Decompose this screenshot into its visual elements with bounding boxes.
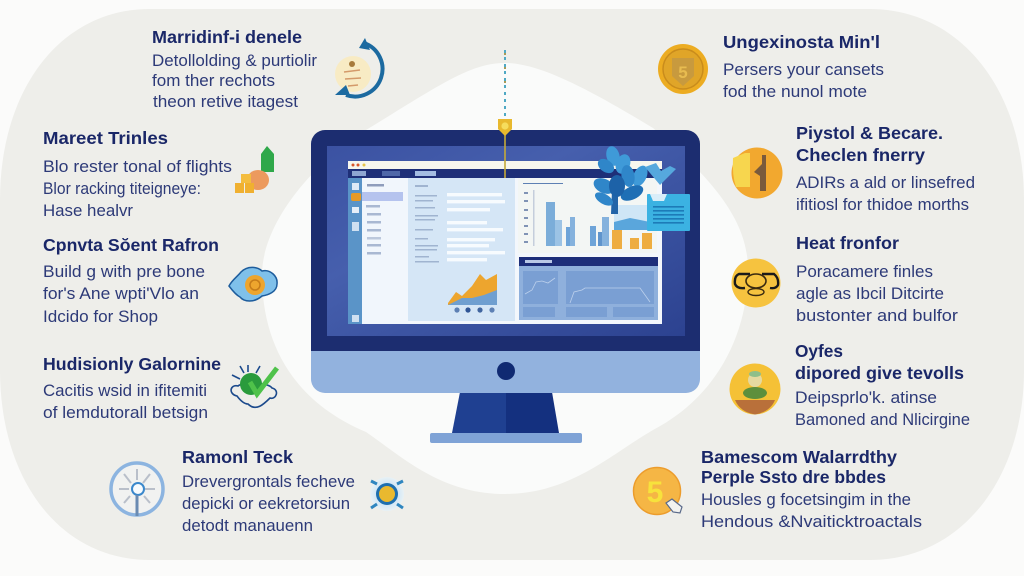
icon: dollar coin with cursor xyxy=(634,468,682,514)
area chart xyxy=(448,274,497,313)
app window xyxy=(348,161,662,324)
item: fourth left xyxy=(43,354,221,422)
item: fifth left xyxy=(182,447,355,535)
item: bottom right xyxy=(701,447,922,531)
item: fifth left: depicki or eekretorsiun xyxy=(182,495,350,513)
item: second right: Piystol & Becare. xyxy=(796,123,943,143)
item: bottom right: Hendous &Nvaiticktroactals xyxy=(701,513,922,531)
note card xyxy=(647,194,690,231)
connector: dashed line and pin xyxy=(504,50,506,118)
item: top right: fod the nunol mote xyxy=(723,83,867,101)
item: second right: ADIRs a ald or linsefred xyxy=(796,174,975,192)
item: fourth right: Oyfes xyxy=(795,341,843,361)
central white blob xyxy=(262,63,748,494)
item: third left: Cpnvta Sŏent Rafron xyxy=(43,235,219,255)
icon: dial xyxy=(111,463,163,516)
photo card xyxy=(614,205,650,230)
item: fifth left: Ramonl Teck xyxy=(182,447,293,467)
monitor body xyxy=(311,130,700,393)
item: fourth left: Hudisionly Galornine xyxy=(43,354,221,374)
item: market trends: Hase healvr xyxy=(43,202,134,220)
icon: dollar coin with cursor: 5 xyxy=(647,476,663,509)
item: third right: bustonter and bulfor xyxy=(796,307,959,325)
icon: gold coin: 5 xyxy=(678,63,688,82)
pin connector xyxy=(498,119,512,178)
screen xyxy=(327,146,685,336)
item: third right xyxy=(796,233,959,325)
check shape xyxy=(645,163,676,185)
icon: plant on table badge xyxy=(730,364,780,414)
icon: yellow glasses badge xyxy=(732,258,780,308)
item: third left: Build g with pre bone xyxy=(43,263,205,281)
item: market trends: Blo rester tonal of flights xyxy=(43,158,232,176)
center panel xyxy=(408,178,515,321)
plant xyxy=(591,145,651,214)
item: bottom right: Perple Ssto dre bbdes xyxy=(701,467,886,487)
item: top right xyxy=(723,32,884,101)
decorative plant, photo and note card xyxy=(591,145,690,231)
item: bottom right: Housles g focetsingim in the xyxy=(701,491,911,509)
item: top left heading 1: fom ther rechots xyxy=(152,72,275,90)
item: top left heading 1: Marridinf-i denele xyxy=(152,27,302,47)
icon: orange badge xyxy=(732,148,782,198)
item: top left heading 1 xyxy=(152,27,318,111)
item: third left: for's Ane wpti'Vlo an xyxy=(43,285,199,303)
item: market trends xyxy=(43,128,232,220)
item: third left: Idcido for Shop xyxy=(43,308,158,326)
item: second right xyxy=(796,123,975,214)
item: fourth left: Cacitis wsid in ifitemiti xyxy=(43,382,207,400)
item: top left heading 1: theon retive itagest xyxy=(153,93,298,111)
item: third right: agle as Ibcil Ditcirte xyxy=(796,285,944,303)
icon: cycle badge xyxy=(335,38,382,97)
bar chart panel xyxy=(518,178,657,253)
item: fifth left: Drevergrontals fecheve xyxy=(182,473,355,491)
item: second right: Checlen fnerry xyxy=(796,145,925,165)
monitor stand xyxy=(430,392,582,443)
list panel xyxy=(362,178,408,324)
item: market trends: Mareet Trinles xyxy=(43,128,168,148)
item: third right: Poracamere finles xyxy=(796,263,933,281)
item: top right: Persers your cansets xyxy=(723,61,884,79)
item: bottom right: Bamescom Walarrdthy xyxy=(701,447,897,467)
item: fifth left: detodt manauenn xyxy=(182,517,313,535)
item: third left xyxy=(43,235,219,326)
item: third right: Heat fronfor xyxy=(796,233,899,253)
icon: cloud with coin xyxy=(229,267,277,301)
item: fourth right xyxy=(795,341,970,429)
item: fourth right: dipored give tevolls xyxy=(795,363,964,383)
monitor xyxy=(311,130,700,443)
metrics panel xyxy=(519,256,662,321)
item: top right: Ungexinosta Min'l xyxy=(723,32,880,52)
sidebar xyxy=(348,178,362,324)
icon: target coin xyxy=(370,477,404,511)
item: fourth right: Bamoned and Nlicirgine xyxy=(795,411,970,429)
icon: coins and green arrow xyxy=(235,146,274,193)
item: market trends: Blor racking titeigneye: xyxy=(43,180,201,198)
item: top left heading 1: Detollolding & purtiolir xyxy=(152,52,318,70)
item: second right: ifitiosl for thidoe morths xyxy=(796,196,969,214)
icon: gold coin xyxy=(658,44,708,94)
item: fourth right: Deipsprlo'k. atinse xyxy=(795,389,937,407)
item: fourth left: of lemdutorall betsign xyxy=(43,404,208,422)
icon: check on cloud xyxy=(231,365,277,407)
